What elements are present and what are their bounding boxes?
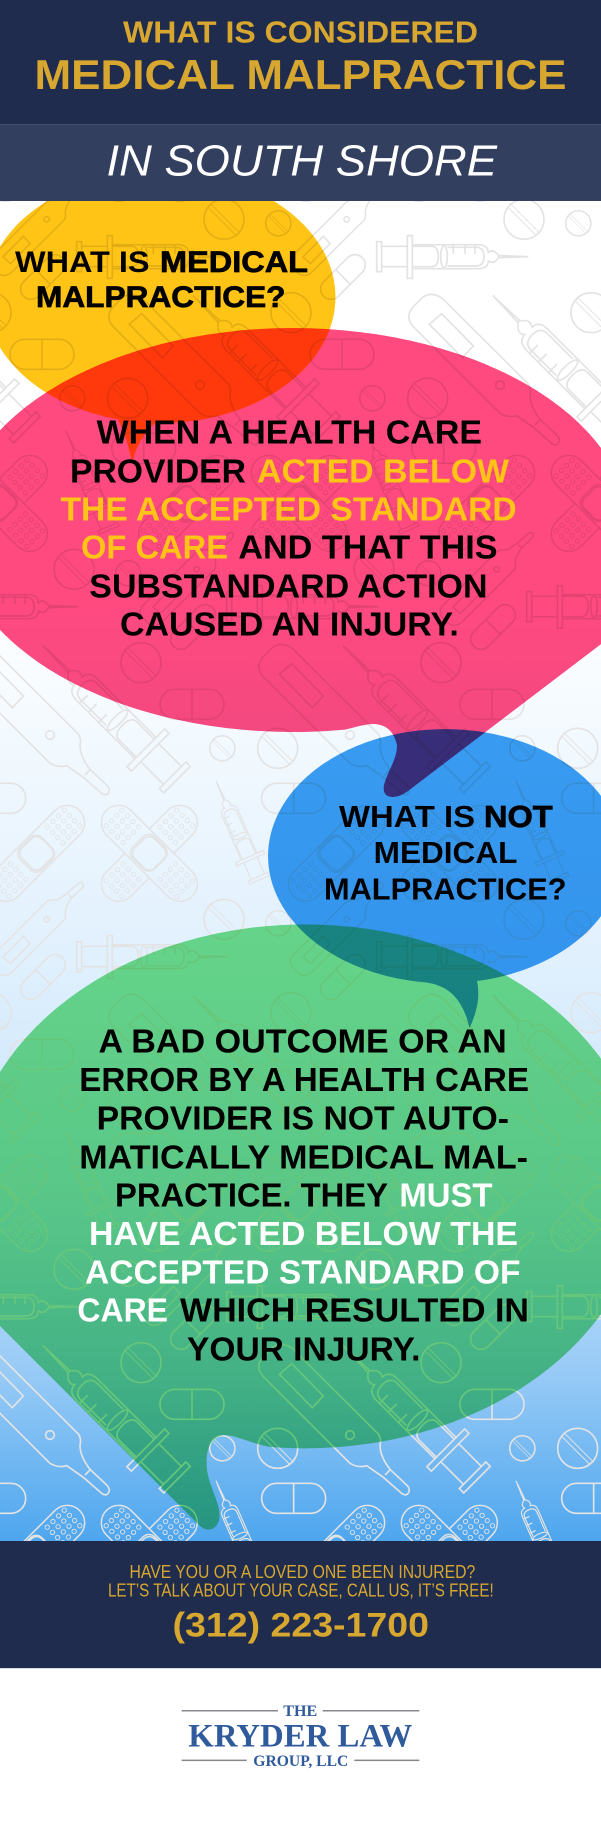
text block: not malpractice explanation: A BAD OUTCOME OR AN <box>98 1023 507 1060</box>
logo: The Kryder Law Group <box>182 1703 419 1770</box>
heading: what is not medical malpractice <box>324 800 566 906</box>
heading: what is medical malpractice: MEDICAL <box>160 246 308 279</box>
text block: malpractice definition: AND THAT THIS <box>238 528 498 566</box>
heading: what is medical malpractice: WHAT IS <box>15 246 150 279</box>
speech bubble: yellow <box>0 171 335 463</box>
text block: malpractice definition: OF CARE <box>81 528 228 566</box>
text block: malpractice definition: PROVIDER <box>70 453 246 490</box>
title: MEDICAL MALPRACTICE <box>34 51 566 98</box>
text block: malpractice definition: CAUSED AN INJURY. <box>120 606 459 643</box>
text block: not malpractice explanation: CARE <box>77 1292 168 1329</box>
heading: what is medical malpractice: MALPRACTICE? <box>36 281 286 314</box>
text block: malpractice definition: ACTED BELOW <box>257 453 510 490</box>
text block: not malpractice explanation: MATICALLY MEDICAL MAL- <box>79 1138 528 1175</box>
logo: The Kryder Law Group: KRYDER LAW <box>188 1719 412 1755</box>
text block: malpractice definition: SUBSTANDARD ACTION <box>89 567 488 604</box>
subtitle: IN SOUTH SHORE <box>106 138 498 186</box>
text block: not malpractice explanation: HAVE ACTED BELOW THE <box>89 1215 518 1252</box>
speech bubble: pink <box>0 328 601 797</box>
speech bubble: blue <box>268 729 601 1028</box>
text block: not malpractice explanation: PRACTICE. THEY <box>115 1177 388 1214</box>
text block: not malpractice explanation: MUST <box>399 1177 492 1214</box>
title <box>34 16 566 98</box>
heading: what is not medical malpractice: MEDICAL <box>374 836 517 870</box>
text block: not malpractice explanation: PROVIDER IS NOT AUTO- <box>97 1100 509 1136</box>
logo: The Kryder Law Group: THE <box>283 1703 317 1720</box>
call to action text: LET’S TALK ABOUT YOUR CASE, CALL US, IT’S FREE! <box>108 1581 494 1601</box>
logo panel <box>0 1668 601 1823</box>
phone number: (312) 223-1700 <box>172 1607 429 1645</box>
title: WHAT IS CONSIDERED <box>123 16 478 50</box>
background gradient <box>0 201 601 1541</box>
logo: The Kryder Law Group: GROUP, LLC <box>253 1753 348 1770</box>
heading: what is not medical malpractice: NOT <box>484 800 553 834</box>
text block: not malpractice explanation <box>77 1023 529 1368</box>
call to action text <box>108 1562 494 1601</box>
heading: what is not medical malpractice: WHAT IS <box>339 800 475 834</box>
subtitle band <box>0 124 601 201</box>
header panel <box>0 0 601 124</box>
heading: what is medical malpractice <box>15 246 308 314</box>
heading: what is not medical malpractice: MALPRACTICE? <box>324 872 566 906</box>
text block: not malpractice explanation: YOUR INJURY. <box>187 1331 420 1368</box>
speech bubble: green <box>0 924 601 1530</box>
text block: malpractice definition: WHEN A HEALTH CARE <box>97 414 482 450</box>
text block: not malpractice explanation: WHICH RESULTED IN <box>180 1292 529 1329</box>
footer call to action panel <box>0 1541 601 1668</box>
text block: malpractice definition <box>60 414 517 643</box>
text block: malpractice definition: THE ACCEPTED STANDARD <box>60 491 517 528</box>
text block: not malpractice explanation: ERROR BY A HEALTH CARE <box>79 1061 529 1098</box>
text block: not malpractice explanation: ACCEPTED STANDARD OF <box>85 1253 520 1290</box>
call to action text: HAVE YOU OR A LOVED ONE BEEN INJURED? <box>130 1562 475 1582</box>
